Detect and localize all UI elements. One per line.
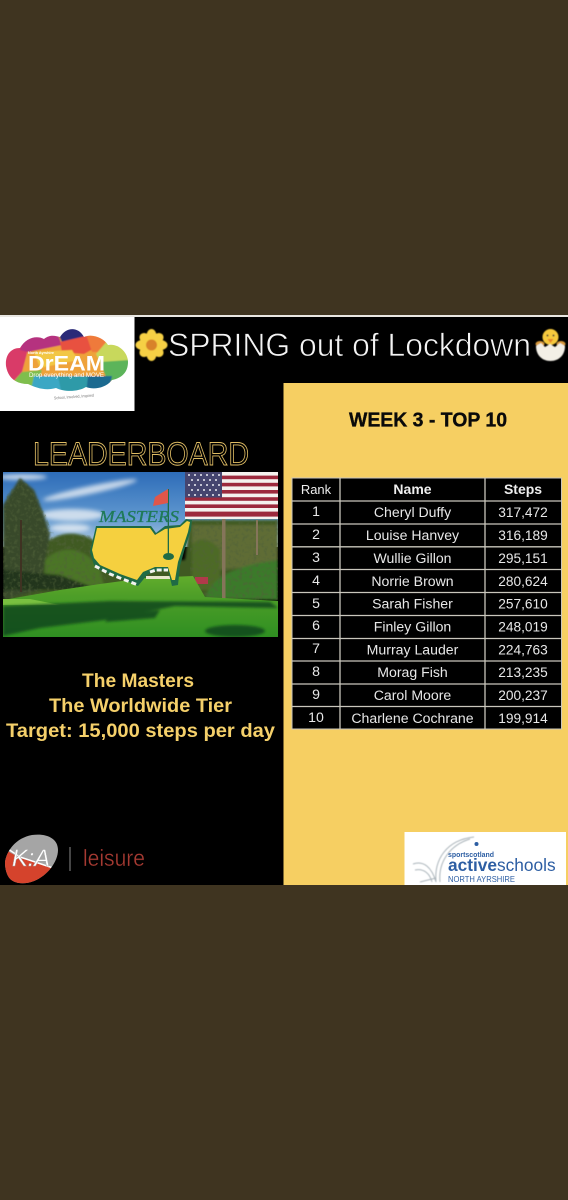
icon: blossom: [136, 329, 168, 361]
table rows: 7: [312, 640, 320, 656]
week heading: WEEK 3 - TOP 10: [349, 408, 507, 432]
table rows: Charlene Cochrane: [351, 710, 474, 726]
sportscotland text: sportscotland: [448, 852, 494, 859]
table rows: 2: [312, 526, 320, 542]
tier text: [6, 671, 275, 742]
icon: hatching chick: [536, 329, 566, 361]
KA monogram: K:A: [12, 845, 50, 872]
leaderboard table: [292, 478, 562, 729]
table rows: 1: [312, 503, 320, 519]
table header: Name: [393, 481, 432, 497]
table rows: [308, 503, 548, 726]
tier level: The Worldwide Tier: [49, 696, 233, 717]
white rule above main panel: [0, 315, 568, 317]
US flag: [185, 472, 278, 519]
logo: KA leisure: [5, 834, 144, 884]
Masters wordmark: MASTERS: [98, 507, 180, 526]
table rows: 224,763: [498, 642, 548, 658]
table rows: 213,235: [498, 665, 548, 680]
table rows: 295,151: [498, 551, 548, 566]
table header: Rank: [301, 482, 332, 497]
logo footer: School, Involved, Inspired: [54, 393, 94, 400]
logo small heading: North Ayrshire: [28, 350, 55, 355]
tier name: The Masters: [82, 671, 194, 692]
table rows: 199,914: [498, 711, 548, 726]
table rows: 280,624: [498, 574, 548, 589]
table rows: Murray Lauder: [367, 642, 459, 658]
yellow panel: [284, 383, 568, 885]
logo tagline: Drop everything and MOVE: [29, 372, 105, 379]
table rows: Carol Moore: [374, 687, 451, 703]
table header: Steps: [504, 481, 542, 497]
table rows: Wullie Gillon: [373, 550, 452, 566]
table rows: 316,189: [498, 528, 548, 543]
leisure wordmark: leisure: [83, 845, 145, 871]
table rows: Norrie Brown: [371, 573, 454, 589]
table rows: 5: [312, 595, 320, 611]
logo wordmark: DrEAM: [28, 352, 105, 376]
North Ayrshire text: NORTH AYRSHIRE: [448, 875, 515, 884]
table rows: Finley Gillon: [374, 618, 451, 634]
table rows: Morag Fish: [377, 664, 448, 680]
table header: [301, 481, 542, 497]
infographic canvas: [0, 315, 568, 885]
table rows: 8: [312, 663, 320, 679]
table rows: 9: [312, 686, 320, 702]
table rows: 248,019: [498, 620, 548, 634]
main black panel: [0, 317, 568, 885]
table rows: 10: [308, 709, 324, 725]
fairway shadows: [3, 601, 278, 637]
photo: Masters golf course: [0, 472, 278, 637]
Masters logo: [90, 489, 192, 586]
logo: Active Schools: [404, 832, 566, 885]
table rows: Cheryl Duffy: [374, 504, 452, 520]
title: SPRING out of Lockdown: [168, 327, 531, 363]
fairway: [3, 576, 278, 637]
table rows: 317,472: [498, 505, 548, 520]
table rows: 200,237: [498, 688, 548, 703]
logo: DrEAM: [0, 317, 134, 411]
table rows: 3: [312, 549, 320, 565]
table rows: 6: [312, 617, 320, 633]
table rows: Sarah Fisher: [372, 596, 453, 612]
table rows: Louise Hanvey: [366, 527, 460, 543]
target: Target: 15,000 steps per day: [6, 721, 275, 742]
sky: [3, 472, 278, 547]
activeschools text: activeschools: [448, 855, 556, 875]
heading: leaderboard: LEADERBOARD: [33, 436, 249, 472]
tree line: [3, 478, 278, 600]
table rows: 4: [312, 572, 320, 588]
table rows: 257,610: [498, 596, 548, 612]
